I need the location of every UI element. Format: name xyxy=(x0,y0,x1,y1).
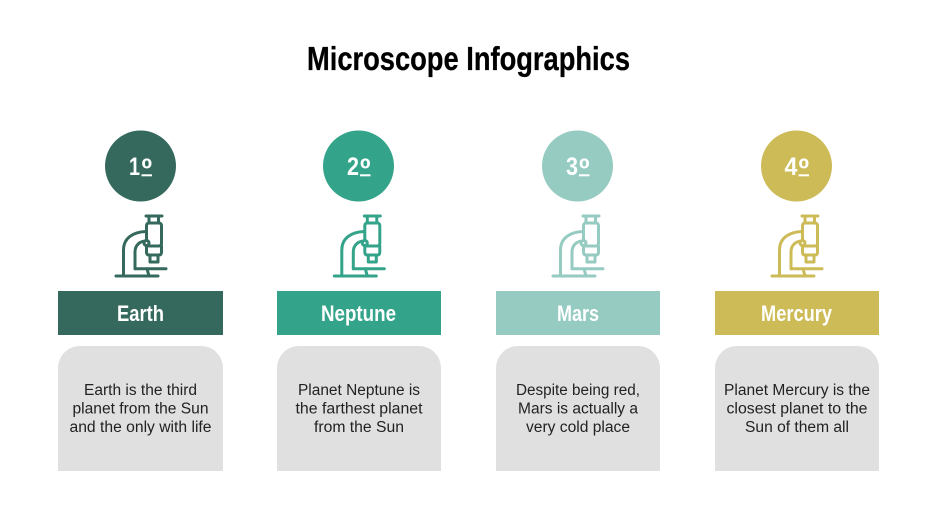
text card: Mercury: closest planet to the xyxy=(726,400,868,418)
number badge: 1: º xyxy=(142,153,152,186)
text card: Earth: and the only with life xyxy=(70,419,212,436)
text card: Earth xyxy=(58,346,223,471)
text card: Mars: Despite being red, xyxy=(516,382,640,399)
number badge: 3: º xyxy=(579,153,590,186)
text card: Mercury: Sun of them all xyxy=(745,419,849,436)
text card: Neptune xyxy=(277,346,441,471)
panel: Mercury xyxy=(715,130,879,471)
heading bar: Neptune: Neptune xyxy=(321,301,396,326)
panel: Earth xyxy=(58,130,223,471)
number badge: 2: º xyxy=(360,153,371,186)
number badge: 1 xyxy=(105,130,176,202)
panel: Mars xyxy=(496,130,660,471)
heading bar: Earth: Earth xyxy=(117,301,164,326)
icon: microscope xyxy=(553,216,603,276)
number badge: 2: 2 xyxy=(347,153,359,181)
text card: Earth: planet from the Sun xyxy=(72,400,208,418)
heading bar: Neptune xyxy=(277,291,441,335)
heading bar: Earth xyxy=(58,291,223,335)
text card: Mars xyxy=(496,346,660,471)
number badge: 4: 4 xyxy=(784,153,798,181)
text card: Mars: very cold place xyxy=(526,419,630,436)
heading bar: Mercury xyxy=(715,291,879,335)
heading bar: Mars: Mars xyxy=(557,301,599,326)
text card: Neptune: Planet Neptune is xyxy=(298,382,420,399)
text card: Mercury xyxy=(715,346,879,471)
number badge: 4: º xyxy=(798,153,809,186)
number badge: 2 xyxy=(323,130,394,202)
number badge: 3 xyxy=(542,130,613,202)
text card: Earth: Earth is the third xyxy=(84,382,197,399)
text card: Mars: Mars is actually a xyxy=(518,400,638,418)
icon: microscope xyxy=(772,216,822,276)
panel: Neptune xyxy=(277,130,441,471)
title: Microscope Infographics xyxy=(307,40,630,77)
icon: microscope xyxy=(334,216,384,276)
number badge: 3: 3 xyxy=(566,153,578,181)
text card: Neptune: the farthest planet xyxy=(296,400,423,418)
text card: Neptune: from the Sun xyxy=(314,419,404,436)
heading bar: Mars xyxy=(496,291,660,335)
number badge: 1: 1 xyxy=(129,153,140,181)
text card: Mercury: Planet Mercury is the xyxy=(724,382,870,399)
number badge: 4 xyxy=(761,130,832,202)
icon: microscope xyxy=(116,216,166,276)
heading bar: Mercury: Mercury xyxy=(761,301,833,326)
